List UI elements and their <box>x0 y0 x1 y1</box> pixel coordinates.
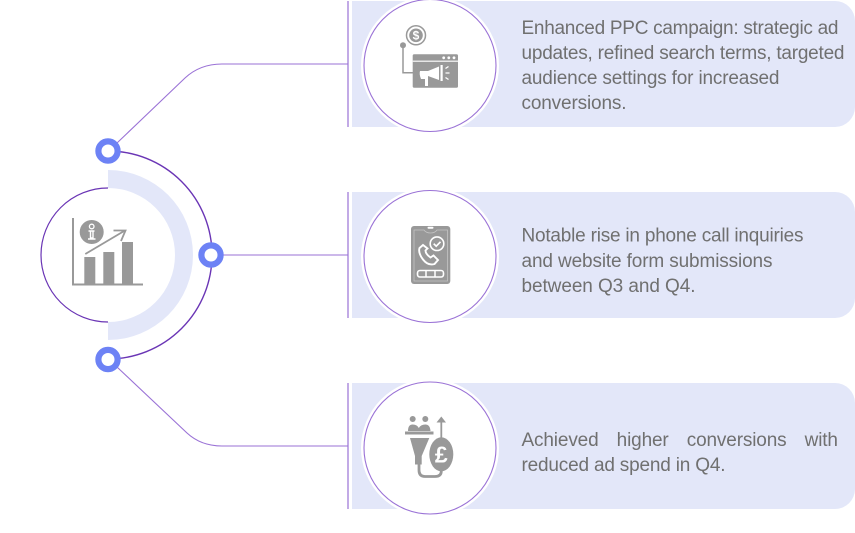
panel background <box>352 383 855 509</box>
panel: phone inquiries <box>348 188 855 326</box>
panel text: updates, refined search terms, targeted <box>522 43 844 64</box>
panel: PPC campaign <box>348 0 855 134</box>
panel text: audience settings for increased <box>522 68 780 89</box>
node: top <box>98 141 118 161</box>
icon: funnel with people and pound coin <box>405 416 453 476</box>
panel text: Enhanced PPC campaign: strategic ad <box>522 18 838 39</box>
icon: smartphone with call and check mark <box>411 226 450 284</box>
panel text: reduced ad spend in Q4. <box>522 455 726 476</box>
panel divider line <box>347 383 349 509</box>
circle badge <box>361 379 499 517</box>
panel divider line <box>347 192 349 318</box>
inner arc <box>41 188 108 322</box>
panel text: conversions. <box>522 93 626 114</box>
panel divider line <box>347 1 349 127</box>
panel background <box>352 1 855 127</box>
icon: growth chart with info badge <box>73 218 143 284</box>
panel background <box>352 192 855 318</box>
thick pale arc band <box>108 170 193 340</box>
circle badge <box>361 188 499 326</box>
connector: middle <box>222 254 348 256</box>
panel text <box>522 18 844 114</box>
icon: browser window with megaphone and dollar coin: $ <box>413 29 420 43</box>
panel text: between Q3 and Q4. <box>522 276 696 297</box>
icon: browser window with megaphone and dollar coin <box>400 26 458 88</box>
panel text: and website form submissions <box>522 251 772 272</box>
node: middle <box>201 245 221 265</box>
panel text <box>522 226 804 297</box>
node: bottom <box>98 350 118 369</box>
panel text <box>522 430 838 476</box>
central hub <box>41 141 221 369</box>
connector: bottom <box>117 367 348 446</box>
outer arc <box>108 151 212 359</box>
panel text: Achieved higher conversions with <box>522 430 838 451</box>
circle badge <box>361 0 499 134</box>
connector: top <box>117 64 348 143</box>
panel text: Notable rise in phone call inquiries <box>522 226 804 246</box>
icon: funnel with people and pound coin: £ <box>435 442 448 468</box>
panel: lower ad spend <box>348 379 855 517</box>
